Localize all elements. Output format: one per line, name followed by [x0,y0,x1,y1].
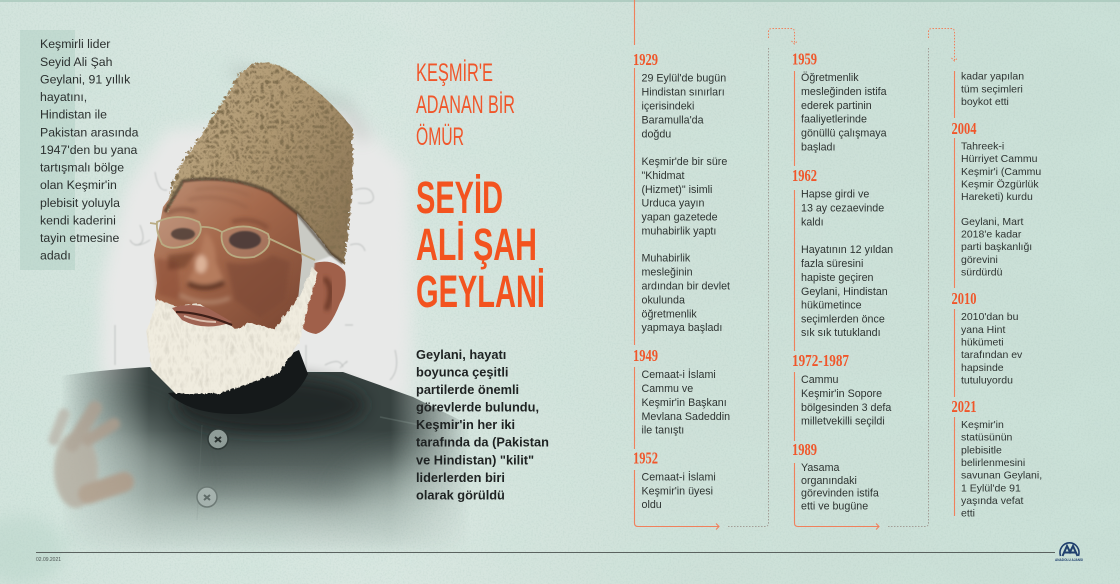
1962 text: seçimlerden önce [801,313,885,325]
2004 text: parti başkanlığı [961,241,1032,253]
1972-1987 text: bölgesinden 3 defa [801,402,891,414]
summary paragraph: partilerde önemli [416,382,519,397]
summary paragraph: tarafında da (Pakistan [416,435,549,450]
year 2010: 2010 [952,289,976,308]
date: 02.09.2021 [36,557,61,563]
beard [146,267,317,393]
1959 text: Öğretmenlik [801,72,859,84]
1989 text: görevinden istifa [801,488,879,500]
1952 text: oldu [642,499,662,511]
1949 text: Cammu ve [642,383,693,395]
2010 text: tarafından ev [961,349,1023,361]
1949 text: Mevlana Sadeddin [642,411,730,423]
1959 text: gönüllü çalışmaya [801,128,887,140]
1962 text: sık sık tutuklandı [801,327,881,339]
1929 text: Urduca yayın [642,198,705,210]
subtitle [416,58,515,151]
year 2021: 2021 [952,397,976,416]
2021 text: plebisitle [961,444,1002,456]
1952 text: Cemaat-i İslami [642,470,716,484]
subtitle: ÖMÜR [416,123,464,151]
continued text: tüm seçimleri [961,83,1023,95]
1962 text: hükümetince [801,300,862,312]
1962 text: Geylani, Hindistan [801,286,888,298]
1929 text: "Khidmat [642,170,685,182]
2010 text: 2010'dan bu [961,311,1019,323]
1989 text: Yasama [801,462,839,474]
1929 text: Hindistan sınırları [642,87,725,99]
1929 text: doğdu [642,128,671,140]
collar [168,350,308,414]
1929 text: içerisindeki [642,100,694,112]
year 2004: 2004 [952,119,976,138]
2004 text: sürdürdü [961,266,1003,278]
1962 text: Hapse girdi ve [801,189,869,201]
1929 text: (Hizmet)" isimli [642,184,712,196]
summary paragraph: Keşmir'in her iki [416,417,515,432]
intro text: hayatını, [40,90,87,104]
subtitle: ADANAN BİR [416,90,515,119]
2004 text: Tahreek-i [961,140,1004,152]
side hair [291,210,333,300]
2004 text: Hareketi) kurdu [961,191,1033,203]
1972-1987 text: Keşmir'in Sopore [801,388,882,400]
intro text: Geylani, 91 yıllık [40,72,131,86]
1929 text: muhabirlik yaptı [642,226,716,238]
intro text: kendi kaderini [40,214,116,228]
year 1959: 1959 [792,50,817,68]
2010 text: tutuluyordu [961,374,1013,386]
1962 text: kaldı [801,216,824,228]
2004 text: Keşmir'i (Cammu [961,166,1041,178]
intro text: olan Keşmir'in [40,178,117,192]
intro text: Hindistan ile [40,108,107,122]
intro text: adadı [40,248,71,262]
buttons [208,429,228,449]
1962 text: 13 ay cezaevinde [801,202,884,214]
ear [299,262,346,334]
photo backdrop [100,110,412,400]
1949 text: ile tanıştı [642,424,684,436]
1972-1987 text: Cammu [801,374,838,386]
summary paragraph: olarak görüldü [416,487,505,502]
1972-1987 text: milletvekilli seçildi [801,416,885,428]
jacket [65,366,466,549]
1929 text: Keşmir'de bir süre [642,156,727,168]
1989 text: organındaki [801,475,857,487]
year 1989: 1989 [792,440,817,459]
hat [165,61,352,263]
2021 text: etti [961,508,975,520]
intro text: plebisit yoluyla [40,196,120,210]
2021 text: statüsünün [961,432,1013,444]
title: SEYİD [416,172,503,223]
1962 text: Hayatının 12 yıldan [801,244,893,256]
year 1962: 1962 [792,166,817,185]
hat smudge [232,70,365,140]
intro text: tartışmalı bölge [40,160,124,174]
2021 text: yaşında vefat [961,495,1024,507]
face shading [156,188,290,318]
intro text: Pakistan arasında [40,126,139,140]
1959 text: ederek partinin [801,100,872,112]
2004 text: Keşmir Özgürlük [961,178,1039,190]
year 1929: 1929 [633,50,658,69]
1962 text: hapiste geçiren [801,272,874,284]
portrait photo [30,61,470,562]
1959 text: mesleğinden istifa [801,86,887,98]
title: ALİ ŞAH [416,219,537,270]
summary paragraph: görevlerde bulundu, [416,400,539,415]
1949 text: Keşmir'in Başkanı [642,397,727,409]
mouth [172,305,232,327]
1929 text: yapmaya başladı [642,322,722,334]
2010 text: hükümeti [961,336,1004,348]
intro text: Keşmirli lider [40,37,110,51]
intro panel [20,30,75,270]
hat rim shadow [165,179,343,263]
year 1949: 1949 [633,346,658,365]
year 1972-1987: 1972-1987 [792,351,849,370]
2021 text: belirlenmesini [961,457,1025,469]
footer rule [36,552,1055,553]
1989 text: etti ve bugüne [801,500,868,512]
2021 text: Keşmir'in [961,419,1004,431]
2004 text: Hürriyet Cammu [961,153,1038,165]
summary paragraph: ve Hindistan) "kilit" [416,452,534,467]
2004 text: 2018'e kadar [961,228,1022,240]
2010 text: hapsinde [961,362,1004,374]
summary paragraph: Geylani, hayatı [416,347,506,362]
2021 text: 1 Eylül'de 91 [961,482,1021,494]
1929 text: Baramulla'da [642,114,704,126]
2004 text: görevini [961,254,998,266]
subtitle: KEŞMİR'E [416,58,493,87]
calligraphy on backdrop [115,172,397,380]
1952 text: Keşmir'in üyesi [642,486,713,498]
1929 text: öğretmenlik [642,308,697,320]
2004 text: Geylani, Mart [961,216,1024,228]
1959 text: faaliyetlerinde [801,114,867,126]
intro text: tayin etmesine [40,231,119,245]
title [416,172,545,317]
timeline connectors [634,0,958,530]
summary paragraph: boyunca çeşitli [416,364,508,380]
intro text: 1947'den bu yana [40,143,138,157]
continued text: boykot etti [961,96,1009,108]
logo: Anadolu Ajansı: ANADOLU AJANSI [1055,557,1083,562]
1929 text: Muhabirlik [642,253,691,265]
year 1952: 1952 [633,448,658,468]
hand [54,408,124,508]
1959 text: başladı [801,141,835,153]
1929 text: mesleğinin [642,267,693,279]
1929 text: yapan gazetede [642,212,718,224]
glasses [150,217,315,260]
logo: Anadolu Ajansı [1055,543,1083,562]
intro text: Seyid Ali Şah [40,55,113,69]
1929 text: 29 Eylül'de bugün [642,73,726,85]
continued text: kadar yapılan [961,70,1024,82]
1929 text: ardından bir devlet [642,280,730,292]
1962 text: fazla süresini [801,258,863,270]
eyes [171,228,195,240]
title: GEYLANİ [416,266,545,317]
summary paragraph: liderlerden biri [416,470,505,485]
2021 text: savunan Geylani, [961,470,1042,482]
1949 text: Cemaat-i İslami [642,368,716,381]
1929 text: okulunda [642,294,685,306]
2010 text: yana Hint [961,324,1005,336]
face [154,178,302,335]
